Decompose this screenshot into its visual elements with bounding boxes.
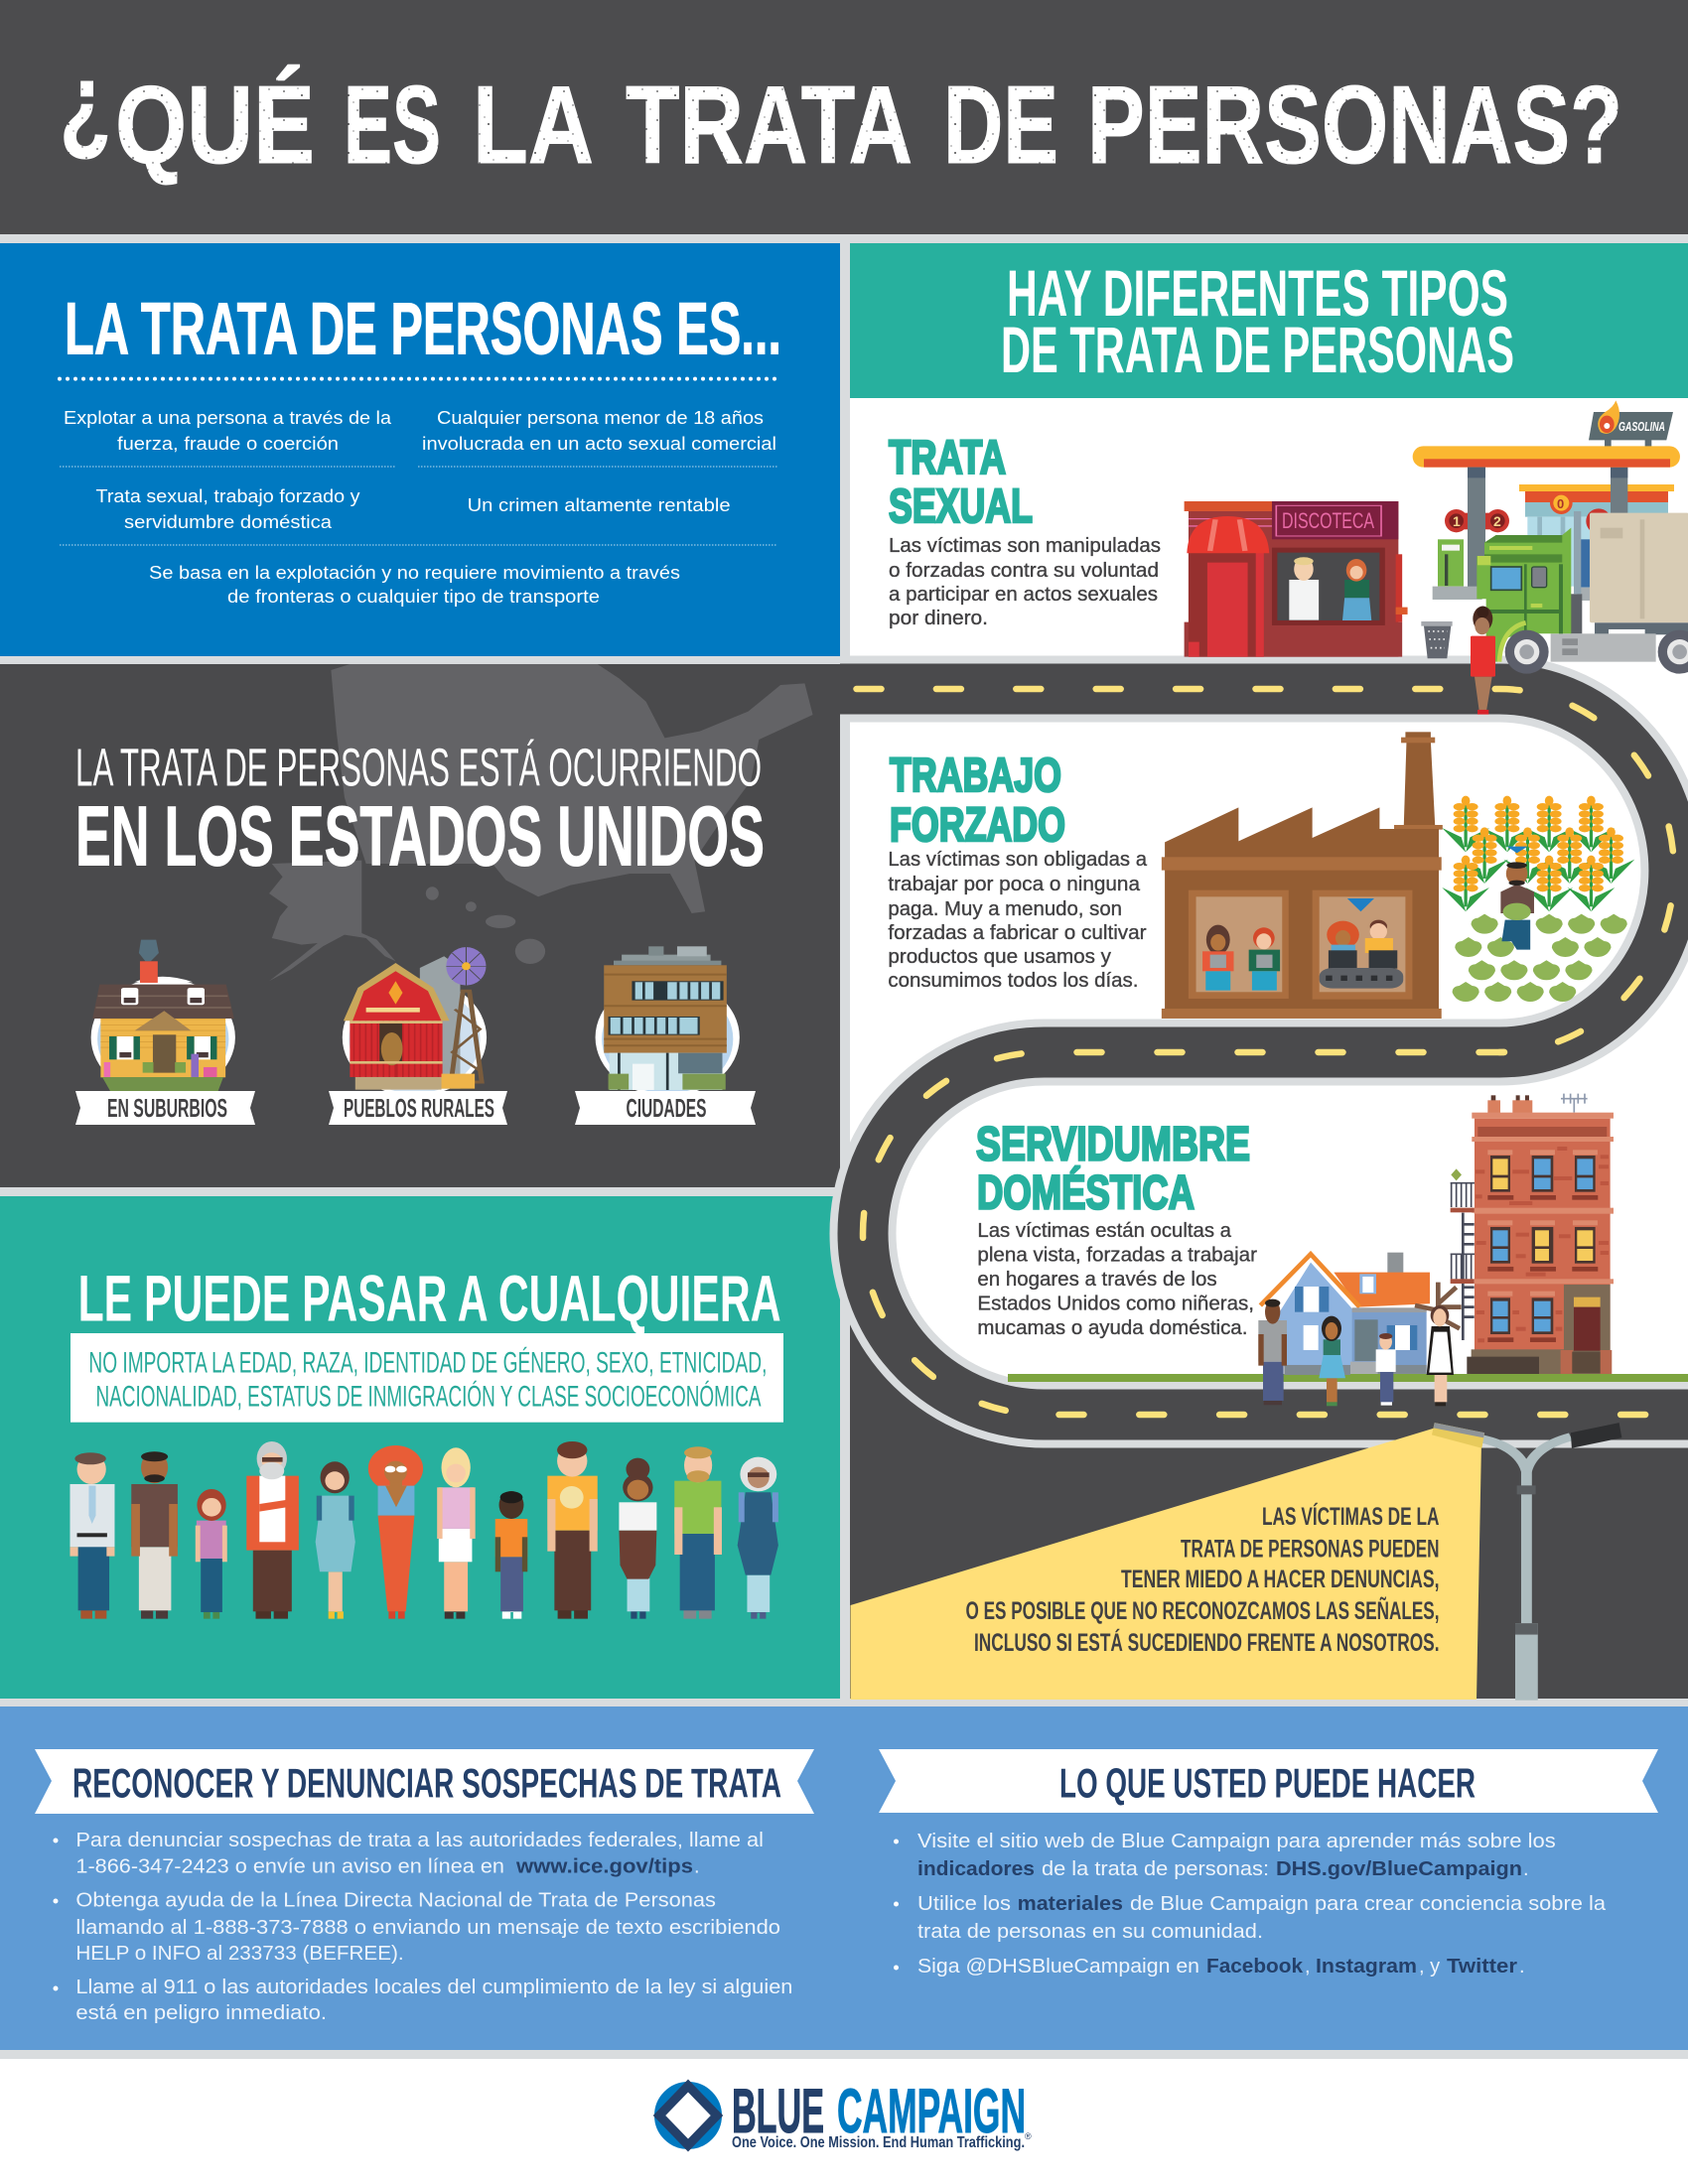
- body: servidumbre domestica: mucamas o ayuda doméstica.: [977, 1317, 1247, 1339]
- person: worker 4: [1365, 920, 1393, 953]
- icon: discoteca nightclub: [1185, 501, 1408, 657]
- body: trabajo forzado: [888, 849, 1148, 992]
- fire escape: [1451, 1168, 1475, 1340]
- icon: corn field and farm worker: [1442, 796, 1634, 1002]
- bullet list: actions: Twitter: [1447, 1956, 1517, 1978]
- person: man in window: [1289, 557, 1319, 620]
- logo: blue campaign: BLUE: [732, 2077, 824, 2146]
- bullet list: actions: Instagram: [1316, 1956, 1417, 1978]
- map of the United States: [269, 664, 813, 981]
- panel: title band: [0, 0, 1688, 234]
- bullet list: reporting: llamando al 1-888-373-7888 o enviando un mensaje de texto escribiendo: [75, 1917, 780, 1939]
- person: man in gray shirt: [1258, 1299, 1287, 1405]
- bullet list: actions: de la trata de personas:: [1042, 1858, 1269, 1880]
- bullet list: reporting: HELP o INFO al 233733 (BEFREE).: [75, 1943, 404, 1965]
- bullet list: actions: DHS.gov/BlueCampaign: [1276, 1858, 1522, 1880]
- heading: trata sexual: SEXUAL: [889, 480, 1033, 533]
- heading: servidumbre domestica: SERVIDUMBRE: [976, 1119, 1250, 1171]
- grass strip: [1008, 1374, 1688, 1382]
- icon: barn and windmill: [343, 947, 487, 1096]
- definition list: fuerza, fraude o coerción: [117, 433, 339, 454]
- windows: [1487, 1150, 1598, 1342]
- icon: suburban house: [91, 940, 235, 1096]
- icon: brick apartment building: [1451, 1094, 1614, 1374]
- person: boy: [495, 1491, 527, 1619]
- logo: blue campaign: ®: [1025, 2131, 1032, 2141]
- body: trabajo forzado: consumimos todos los días.: [888, 970, 1138, 992]
- body: servidumbre domestica: Estados Unidos como niñeras,: [977, 1294, 1254, 1315]
- icon: gas station: 0: [1557, 496, 1564, 511]
- bullet list: reporting: 1-866-347-2423 o envíe un aviso en línea en: [75, 1856, 504, 1878]
- definition list: Cualquier persona menor de 18 años: [437, 407, 764, 428]
- definition list: [64, 407, 776, 607]
- title: TRATA: [626, 64, 913, 187]
- bullet list: actions: .: [1519, 1956, 1525, 1978]
- person: man with tie: [70, 1452, 114, 1619]
- body: trata sexual: por dinero.: [889, 608, 988, 629]
- body: trata sexual: [889, 535, 1161, 629]
- heading: trabajo forzado: TRABAJO: [890, 750, 1061, 802]
- bullet list: reporting: Para denunciar sospechas de trata a las autoridades federales, llame al: [75, 1830, 764, 1851]
- person: boy in white shirt: [1376, 1333, 1396, 1406]
- heading: en los estados unidos: EN LOS ESTADOS UNIDOS: [75, 790, 765, 885]
- banner: en suburbios: [75, 1091, 255, 1125]
- icon: trash can: [1421, 621, 1453, 658]
- truck: [1477, 511, 1688, 674]
- title: [60, 41, 1622, 187]
- title: QUÉ: [115, 64, 315, 187]
- body: trata sexual: Las víctimas son manipuladas: [889, 535, 1161, 557]
- body: servidumbre domestica: plena vista, forzadas a trabajar: [977, 1245, 1257, 1267]
- person: worker 3: [1327, 921, 1359, 953]
- body: trabajo forzado: productos que usamos y: [888, 946, 1111, 968]
- person: older woman: [738, 1457, 778, 1619]
- person: man in yellow shirt: [547, 1441, 598, 1619]
- body: trabajo forzado: Las víctimas son obligadas a: [888, 849, 1148, 871]
- body: trata sexual: a participar en actos sexuales: [889, 584, 1158, 606]
- bullet list: actions: [894, 1831, 1607, 1978]
- panel: le puede pasar a cualquiera: [0, 1196, 840, 1699]
- icon: blue house: [1260, 1253, 1430, 1375]
- person: woman with bun: [619, 1458, 656, 1619]
- logo: blue campaign: One Voice. One Mission. End Human Trafficking.: [732, 2134, 1025, 2151]
- callout: no importa: [70, 1333, 783, 1423]
- icon: gas station: 1: [1453, 513, 1461, 529]
- callout: no importa: NO IMPORTA LA EDAD, RAZA, IDENTIDAD DE GÉNERO, SEXO, ETNICIDAD,: [88, 1347, 767, 1380]
- panel: lo que usted puede hacer: [844, 1706, 1688, 2050]
- definition list: de fronteras o cualquier tipo de transporte: [227, 586, 600, 607]
- heading: la trata de personas es: LA TRATA DE PERSONAS ES...: [65, 288, 781, 369]
- banner: ciudades: CIUDADES: [626, 1093, 707, 1123]
- banner: ciudades: [575, 1091, 756, 1125]
- callout: no importa: NACIONALIDAD, ESTATUS DE INMIGRACIÓN Y CLASE SOCIOECONÓMICA: [95, 1381, 761, 1414]
- title: LA: [473, 64, 594, 187]
- callout: victims may fear reporting: O ES POSIBLE QUE NO RECONOZCAMOS LAS SEÑALES,: [965, 1595, 1440, 1625]
- panel: hay diferentes tipos header: [850, 243, 1688, 398]
- definition list: Explotar a una persona a través de la: [64, 407, 392, 428]
- bullet list: actions: de Blue Campaign para crear conciencia sobre la: [1130, 1893, 1607, 1915]
- person: woman in red dress: [1471, 607, 1495, 715]
- body: servidumbre domestica: en hogares a través de los: [977, 1269, 1217, 1291]
- bullet list: actions: trata de personas en su comunidad.: [917, 1921, 1263, 1943]
- panel: trabajo forzado text: [888, 750, 1148, 992]
- body: servidumbre domestica: [977, 1220, 1257, 1339]
- bullet list: actions: Visite el sitio web de Blue Campaign para aprender más sobre los: [917, 1831, 1556, 1852]
- person: woman in window: [1342, 559, 1371, 620]
- person: worker 1: [1202, 925, 1233, 991]
- icon: gas station: GASOLINA: [1618, 419, 1665, 434]
- banner: lo que usted puede hacer: [879, 1749, 1658, 1813]
- bullet list: actions: Utilice los: [917, 1893, 1011, 1915]
- person: maid: [1427, 1305, 1454, 1406]
- bullet list: reporting: www.ice.gov/tips: [515, 1856, 693, 1878]
- callout: victims may fear reporting: [965, 1502, 1440, 1657]
- icon: street lamp: [1432, 1423, 1621, 1701]
- road: winding route: [840, 689, 1688, 1415]
- body: trabajo forzado: trabajar por poca o ninguna: [888, 874, 1141, 895]
- people row: [70, 1441, 778, 1619]
- banner: reconocer y denunciar: RECONOCER Y DENUNCIAR SOSPECHAS DE TRATA: [72, 1760, 781, 1807]
- icon: city building: [596, 946, 740, 1096]
- bullet list: actions: materiales: [1018, 1893, 1123, 1915]
- body: servidumbre domestica: Las víctimas están ocultas a: [977, 1220, 1232, 1242]
- banner: en suburbios: EN SUBURBIOS: [107, 1093, 227, 1123]
- bullet list: actions: Siga @DHSBlueCampaign en: [917, 1956, 1199, 1978]
- panel: dark lower right area: [850, 1233, 1688, 1699]
- definition list: involucrada en un acto sexual comercial: [422, 433, 776, 454]
- banner: lo que usted puede hacer: LO QUE USTED PUEDE HACER: [1059, 1760, 1476, 1807]
- callout: victims may fear reporting: TRATA DE PERSONAS PUEDEN: [1181, 1536, 1440, 1564]
- title: ¿: [60, 41, 111, 164]
- body: trata sexual: o forzadas contra su voluntad: [889, 560, 1159, 582]
- person: woman in blue skirt: [1319, 1316, 1345, 1406]
- person: woman in blue dress: [316, 1461, 355, 1619]
- person: woman with red hair: [368, 1445, 423, 1619]
- icon: gas station: [1413, 400, 1688, 674]
- banner: pueblos rurales: PUEBLOS RURALES: [344, 1093, 494, 1123]
- banner: reconocer y denunciar: [35, 1749, 814, 1814]
- body: trabajo forzado: forzadas a fabricar o cultivar: [888, 922, 1147, 944]
- heading: hay diferentes tipos: [1001, 256, 1514, 386]
- bullet list: actions: indicadores: [917, 1858, 1035, 1880]
- heading: la trata de personas esta ocurriendo: LA TRATA DE PERSONAS ESTÁ OCURRIENDO: [75, 739, 762, 798]
- logo: blue campaign: [659, 2077, 1032, 2151]
- callout: victims may fear reporting: LAS VÍCTIMAS DE LA: [1262, 1502, 1440, 1531]
- icon: factory: [1162, 732, 1443, 1019]
- person: farm worker: [1500, 862, 1534, 950]
- bullet list: actions: Facebook: [1206, 1956, 1304, 1978]
- person: girl in purple: [196, 1489, 227, 1619]
- heading: trabajo forzado: FORZADO: [890, 799, 1065, 852]
- panel: reconocer y denunciar: [0, 1706, 844, 2050]
- person: blonde woman: [437, 1447, 476, 1619]
- callout: victims may fear reporting: TENER MIEDO A HACER DENUNCIAS,: [1121, 1566, 1440, 1593]
- panel: trata sexual text: [889, 432, 1161, 629]
- yellow light beam: [850, 1429, 1481, 1700]
- definition list: Trata sexual, trabajo forzado y: [95, 485, 360, 506]
- person: man with green shirt: [674, 1446, 722, 1619]
- icon: gas station: 2: [1493, 513, 1501, 529]
- bullet list: actions: , y: [1419, 1956, 1440, 1978]
- title: DE: [943, 64, 1058, 187]
- icon: discoteca nightclub: DISCOTECA: [1282, 508, 1374, 533]
- icon: bare tree: [1415, 1283, 1462, 1328]
- heading: trabajo forzado: [890, 750, 1065, 852]
- bullet list: reporting: Llame al 911 o las autoridades locales del cumplimiento de la ley si alguien: [75, 1977, 792, 1998]
- bullet list: reporting: Obtenga ayuda de la Línea Directa Nacional de Trata de Personas: [75, 1890, 716, 1912]
- person: older man with glasses: [246, 1441, 299, 1619]
- panel: estados unidos: [0, 664, 840, 1187]
- person: worker 2: [1249, 927, 1280, 991]
- panel: white story background: [850, 398, 1688, 1233]
- people: household group: [1258, 1299, 1454, 1406]
- heading: servidumbre domestica: DOMÉSTICA: [977, 1165, 1195, 1219]
- bullet list: actions: .: [1523, 1858, 1529, 1880]
- heading: le puede pasar a cualquiera: LE PUEDE PASAR A CUALQUIERA: [78, 1262, 781, 1335]
- definition list: Un crimen altamente rentable: [468, 494, 731, 515]
- definition list: Se basa en la explotación y no requiere movimiento a través: [149, 562, 680, 583]
- body: trabajo forzado: paga. Muy a menudo, son: [888, 898, 1122, 920]
- heading: trata sexual: TRATA: [889, 432, 1006, 484]
- bullet list: reporting: está en peligro inmediato.: [75, 2002, 327, 2024]
- bullet list: actions: ,: [1305, 1956, 1311, 1978]
- bullet list: reporting: .: [694, 1856, 700, 1878]
- definition list: servidumbre doméstica: [124, 511, 333, 532]
- person: man with beard: [131, 1451, 178, 1619]
- heading: servidumbre domestica: [976, 1119, 1250, 1219]
- banner: pueblos rurales: [329, 1091, 507, 1125]
- panel: inner white loop: [863, 1052, 1688, 1415]
- icon: logo mark: [659, 2086, 717, 2145]
- panel: servidumbre domestica text: [976, 1119, 1257, 1339]
- logo: blue campaign: CAMPAIGN: [837, 2077, 1026, 2146]
- callout: victims may fear reporting: INCLUSO SI ESTÁ SUCEDIENDO FRENTE A NOSOTROS.: [974, 1628, 1440, 1657]
- bullet list: reporting: [54, 1830, 792, 2024]
- title: ES: [344, 64, 441, 187]
- heading: trata sexual: [889, 432, 1033, 533]
- panel: la trata de personas es: [0, 243, 840, 656]
